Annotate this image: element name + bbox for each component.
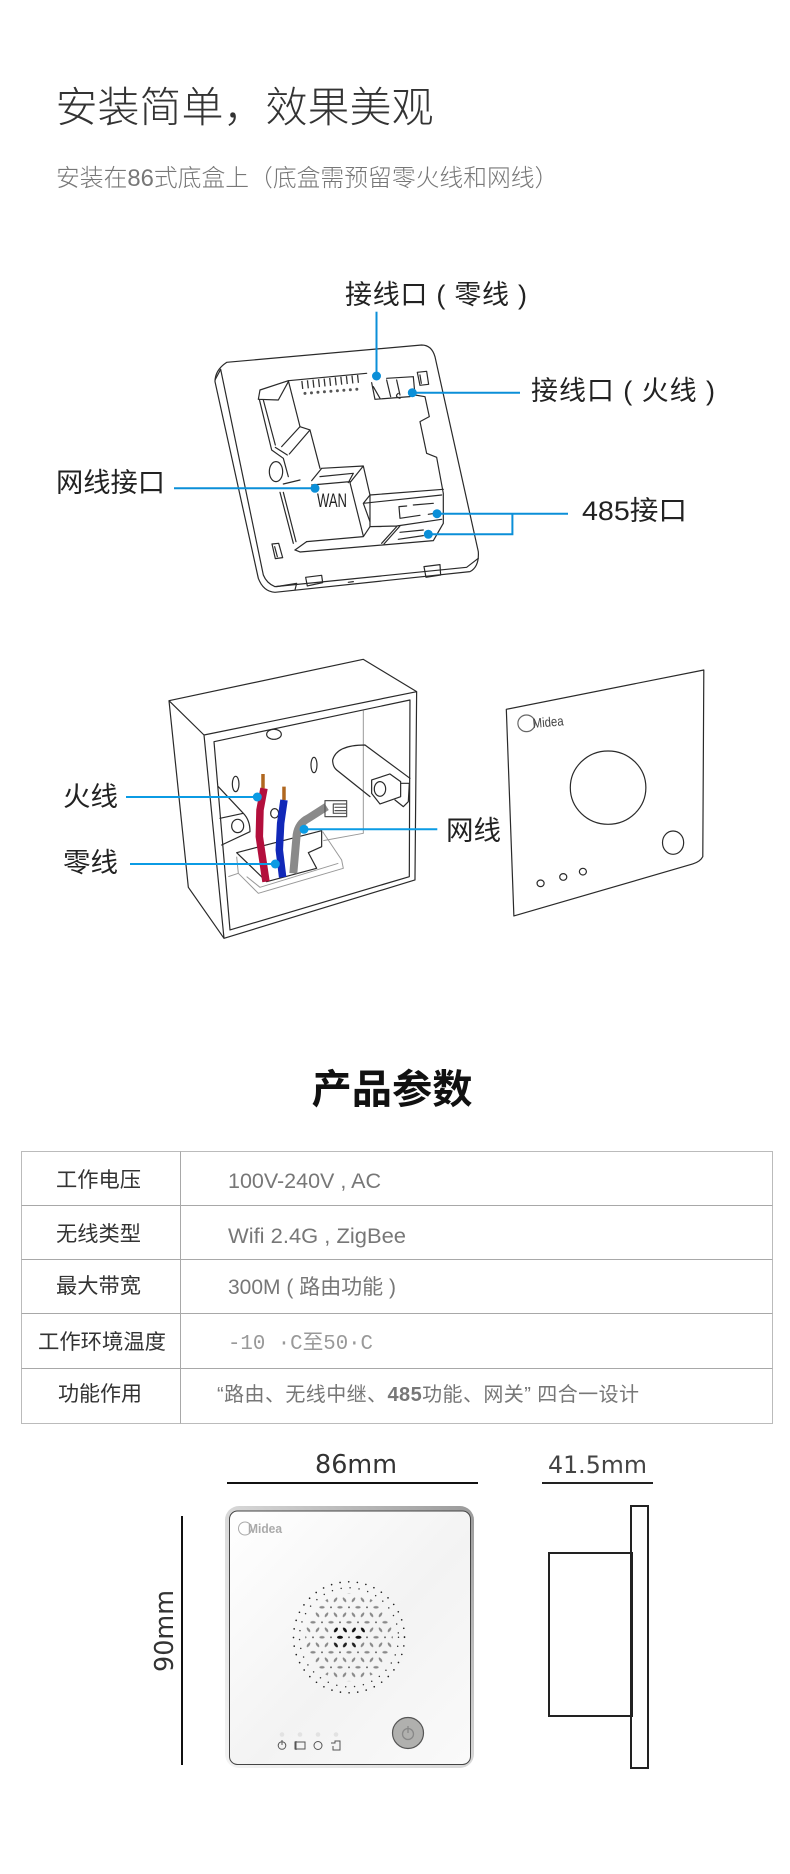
callout: neutral port — [372, 312, 381, 380]
faceplate logo: Midea — [532, 713, 565, 731]
side view: plate — [631, 1506, 648, 1768]
faceplate drawing — [506, 670, 704, 916]
speaker grille — [294, 1582, 404, 1693]
height label: 90mm — [150, 1590, 180, 1672]
row: wireless type: 无线类型 — [56, 1223, 141, 1246]
callout: 485 ports — [424, 509, 568, 539]
row: temperature: -10 ·C至50·C — [228, 1332, 373, 1356]
label: network port: 网线接口 — [56, 468, 165, 498]
label: 485 port: 485接口 — [582, 496, 687, 526]
table grid — [22, 1152, 772, 1424]
row: bandwidth: 最大带宽 — [56, 1275, 141, 1298]
row: bandwidth — [56, 1275, 396, 1299]
label: live wire: 火线 — [63, 782, 118, 812]
label: live port: 接线口 ( 火线 ) — [531, 376, 715, 406]
subtitle: 安装在86式底盒上（底盒需预留零火线和网线） — [56, 165, 558, 192]
section heading: 产品参数 — [312, 1068, 472, 1112]
callout: network port — [174, 484, 320, 493]
callout: live wire — [126, 792, 262, 802]
diagram: back of the device with ports — [56, 280, 715, 592]
title: 安装简单，效果美观 — [56, 84, 434, 131]
width label: 86mm — [315, 1450, 397, 1480]
callout: live port — [408, 388, 520, 397]
logo: Midea — [248, 1521, 283, 1536]
device back drawing — [215, 345, 478, 592]
row: wireless type: Wifi 2.4G , ZigBee — [228, 1225, 406, 1248]
parameter table — [22, 1152, 772, 1424]
depth label: 41.5mm — [548, 1451, 647, 1479]
callout: network wire — [300, 825, 437, 834]
width line — [227, 1482, 478, 1484]
device face — [230, 1511, 470, 1764]
label: network wire: 网线 — [446, 816, 501, 846]
row: temperature — [38, 1331, 373, 1356]
wires: live, neutral, network — [259, 774, 347, 882]
label: neutral port: 接线口 ( 零线 ) — [345, 280, 527, 310]
row: bandwidth: 300M ( 路由功能 ) — [228, 1276, 396, 1299]
side view: body — [549, 1553, 632, 1716]
indicator lights — [280, 1732, 338, 1737]
front dimensions — [150, 1450, 478, 1765]
height line — [181, 1516, 183, 1765]
device front view — [225, 1506, 474, 1768]
depth line — [542, 1482, 653, 1484]
wall box drawing — [169, 659, 417, 938]
row: voltage: 100V-240V , AC — [228, 1170, 381, 1193]
side dimensions — [542, 1451, 653, 1768]
row: voltage: 工作电压 — [56, 1169, 141, 1192]
row: voltage — [56, 1169, 381, 1193]
row: function: 功能作用 — [58, 1383, 142, 1406]
row: temperature: 工作环境温度 — [38, 1331, 166, 1354]
row: wireless type — [56, 1223, 406, 1248]
callout: neutral wire — [130, 860, 280, 868]
status icons — [278, 1740, 340, 1750]
diagram: wall box and faceplate — [63, 659, 704, 938]
row: function: “路由、无线中继、485功能、网关” 四合一设计 — [217, 1383, 639, 1406]
row: function — [58, 1383, 639, 1406]
device body — [225, 1506, 474, 1768]
power button — [392, 1718, 424, 1748]
WAN mark: WAN — [317, 491, 347, 512]
label: neutral wire: 零线 — [63, 848, 118, 878]
